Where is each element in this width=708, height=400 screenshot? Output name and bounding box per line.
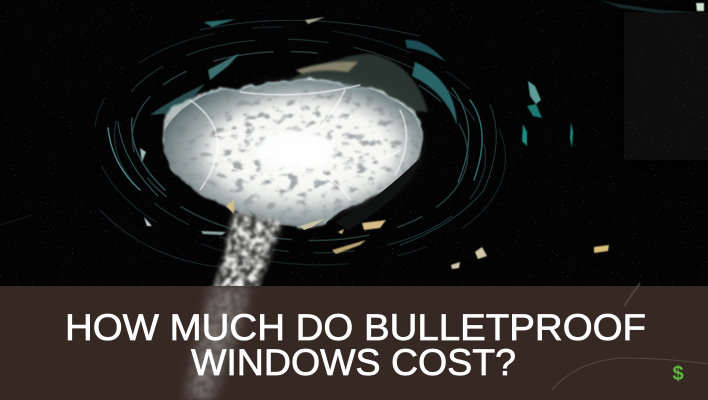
grey teal periphery bbox=[159, 76, 431, 228]
icon: dollar sign logo: $ bbox=[672, 363, 684, 385]
base glass bbox=[164, 80, 423, 226]
title text: HOW MUCH DO BULLETPROOF bbox=[65, 307, 646, 348]
concentric fracture rings bbox=[0, 10, 516, 282]
title text: WINDOWS COST? bbox=[191, 342, 516, 383]
tan reflection on upper shard bbox=[296, 62, 358, 74]
white crack lines bbox=[190, 85, 406, 200]
bullet trail bbox=[210, 210, 284, 286]
rim highlight bbox=[165, 80, 423, 224]
grey flecks bbox=[166, 82, 422, 225]
teal glints on the outer fractures bbox=[140, 0, 700, 162]
bright core bbox=[198, 87, 412, 209]
dark lower-right wedge bbox=[335, 158, 420, 230]
upper dark glass shard bbox=[285, 54, 428, 112]
central white hotspot bbox=[256, 130, 336, 170]
title band bbox=[0, 283, 708, 400]
title text bbox=[65, 307, 646, 383]
shattered impact area bbox=[159, 54, 435, 230]
warm glints below the impact bbox=[144, 3, 704, 269]
